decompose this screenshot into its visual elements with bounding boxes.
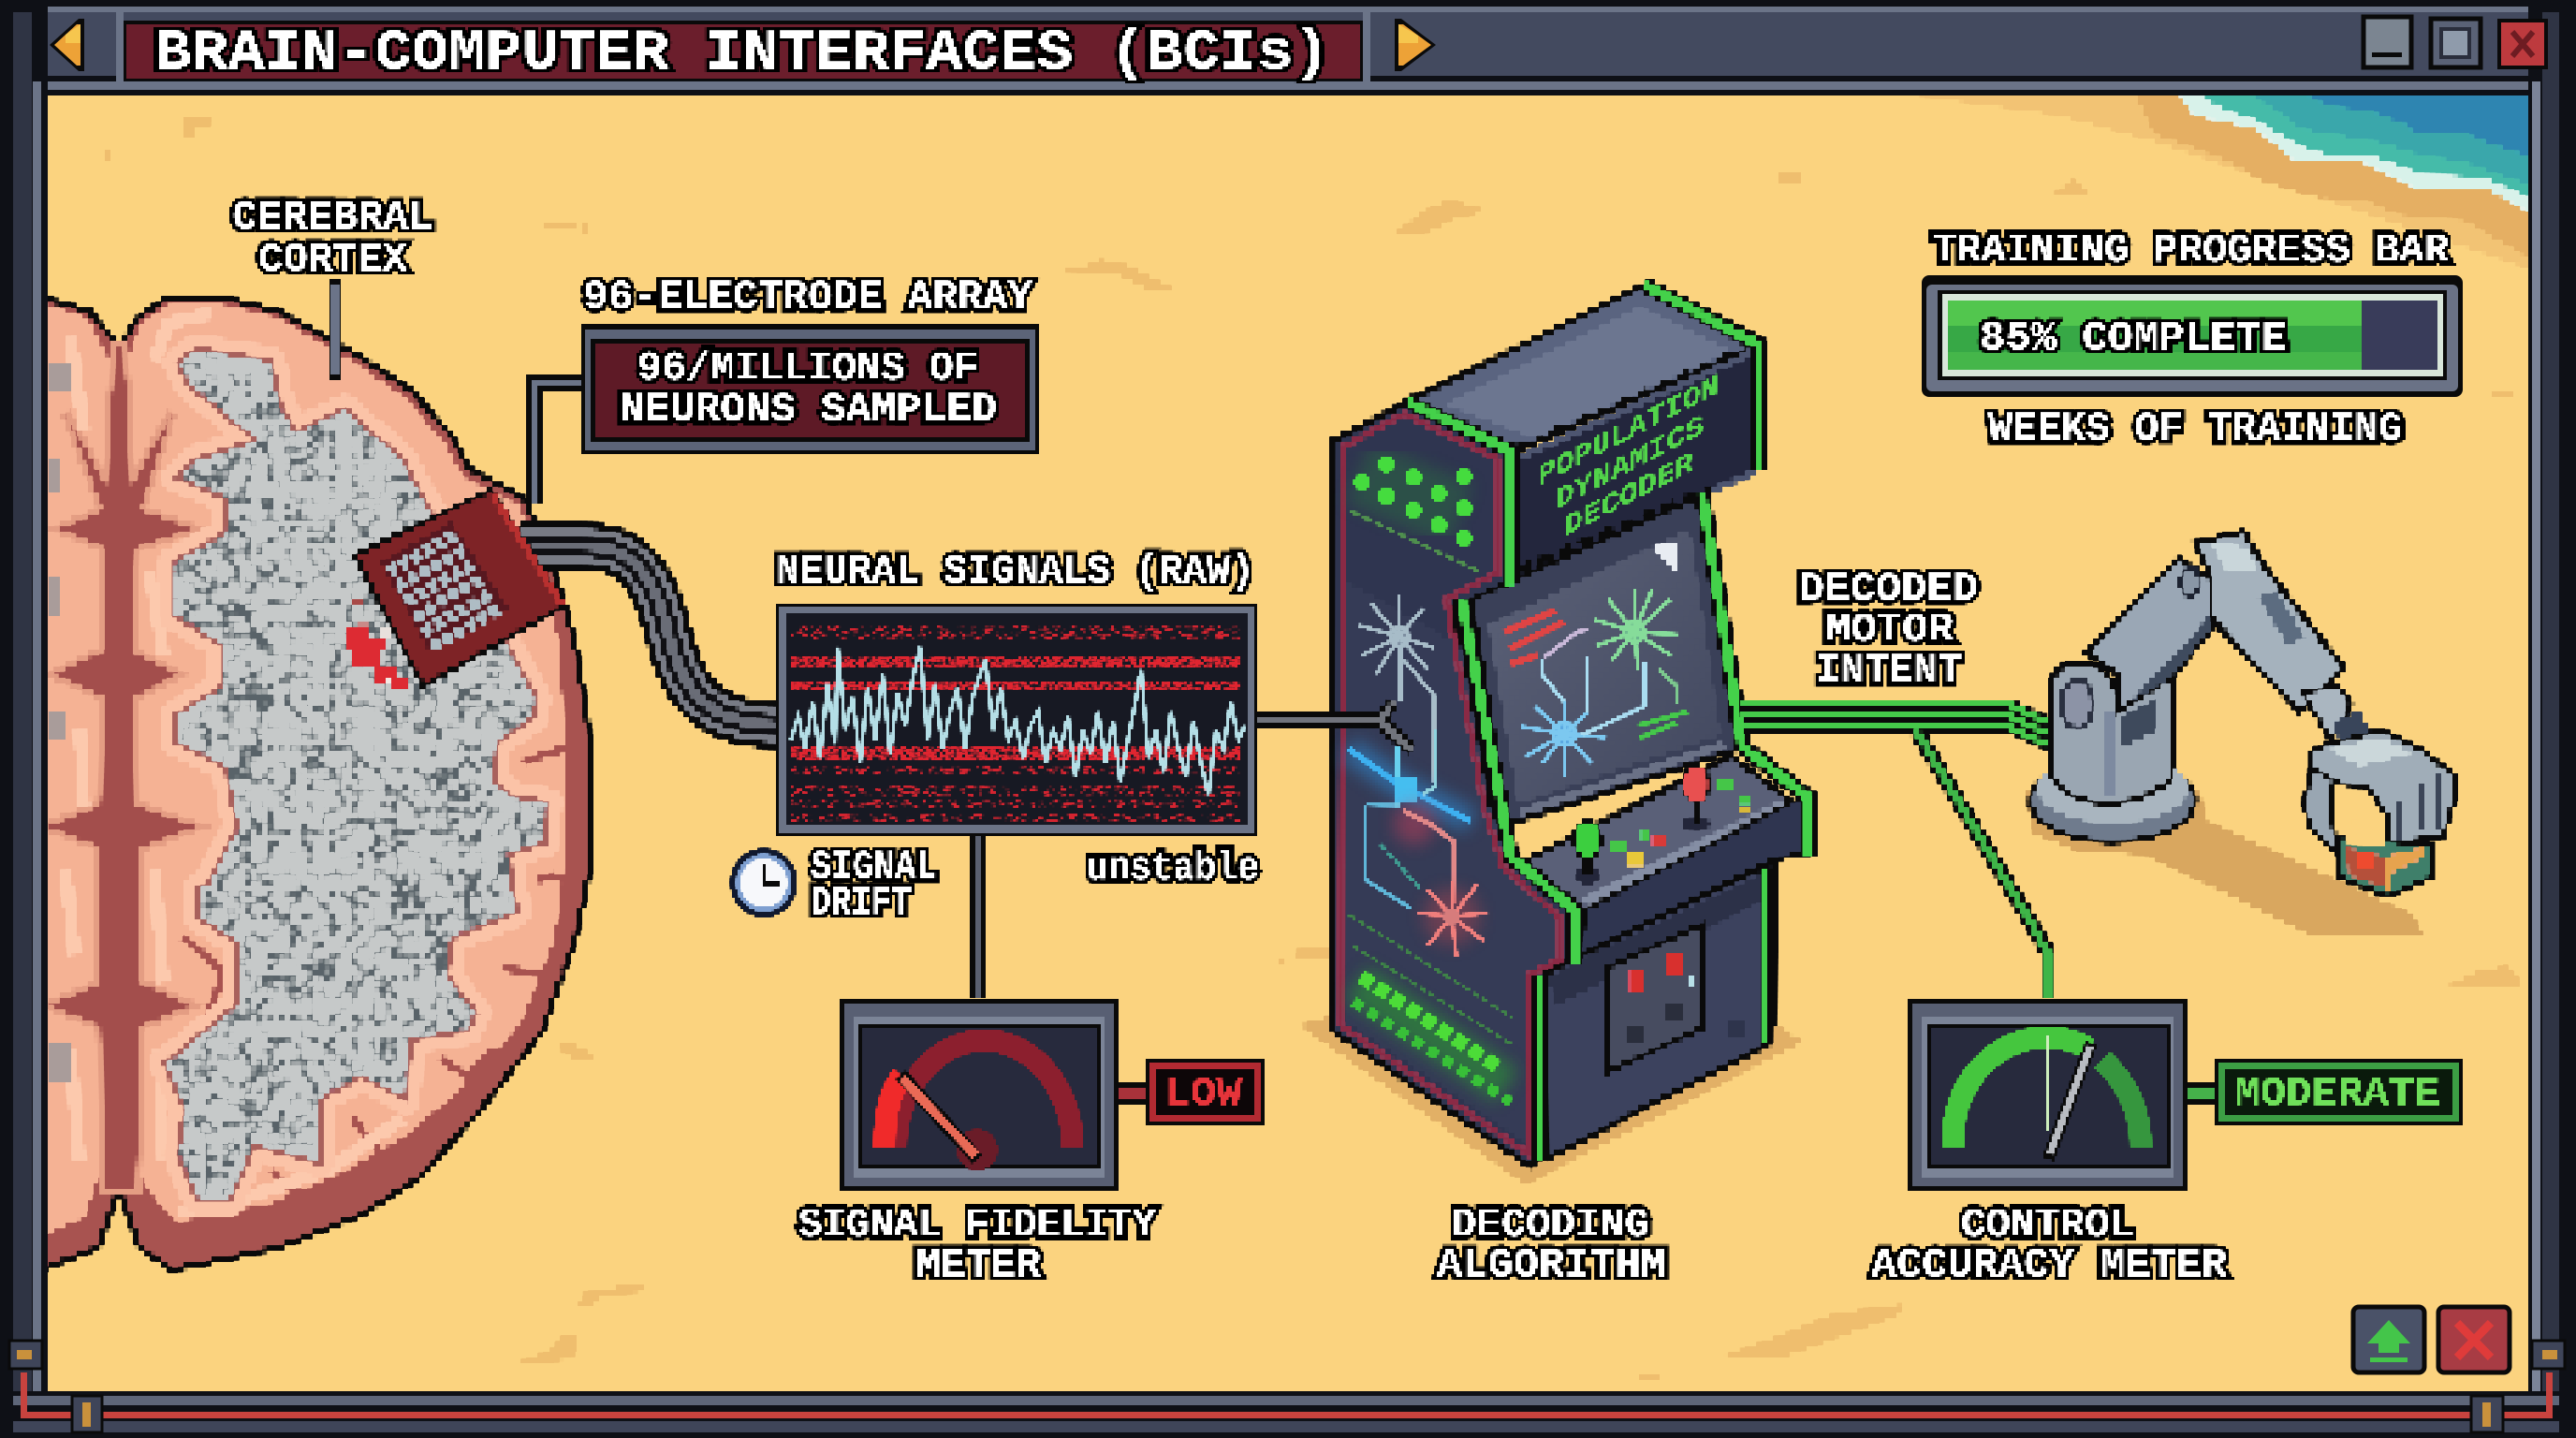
coin slots (1625, 951, 1747, 1045)
dry dark sand band (1880, 90, 2539, 271)
panel buttons (1610, 777, 1749, 866)
maroon trim (1340, 414, 1559, 1153)
neural signal monitor frame (776, 604, 1257, 836)
joystick red (1682, 766, 1710, 832)
screen green dashes (1638, 712, 1688, 738)
training progress bar (1922, 275, 2463, 397)
label: signal fidelity meter: SIGNAL FIDELITY (798, 1202, 1157, 1249)
palm highlight (2331, 738, 2410, 766)
red status line (23, 1412, 2553, 1418)
wrist joint (2334, 712, 2373, 744)
connector bottom right (2471, 1396, 2503, 1432)
label: decoded motor intent: MOTOR (1825, 607, 1954, 653)
accuracy needle core (2050, 1047, 2090, 1153)
label: control accuracy meter: ACCURACY METER (1871, 1242, 2228, 1289)
green motor intent wires (1742, 705, 2055, 1000)
close button (2499, 21, 2546, 67)
lower cabinet (1544, 861, 1775, 1158)
lower cabinet shadow band (1548, 871, 1767, 1006)
joystick green (1573, 821, 1602, 885)
pedestal (2052, 663, 2172, 803)
cube orange seam (2385, 847, 2424, 894)
label: decoded motor intent: INTENT (1816, 648, 1962, 695)
cabinet LED cluster (1354, 456, 1472, 547)
arcade marquee text: DYNAMICS (1556, 409, 1704, 518)
forearm highlight (2211, 541, 2258, 573)
label: decoding algorithm (1437, 1202, 1666, 1289)
fidelity hub (957, 1129, 998, 1170)
brain illustration (41, 298, 593, 1269)
screen blue neuron (1521, 702, 1606, 777)
cube red face (2345, 847, 2385, 888)
neck (1474, 494, 1713, 627)
robot arm shadow (2025, 789, 2422, 933)
progress value: 85% COMPLETE (1980, 315, 2287, 362)
fidelity gauge housing (840, 999, 1119, 1191)
marquee (1517, 348, 1755, 582)
wrist (2303, 685, 2351, 740)
accuracy needle (2048, 1043, 2091, 1159)
label: decoding algorithm: DECODING (1452, 1202, 1649, 1249)
light highlights (66, 314, 402, 1212)
red corner left (21, 1372, 27, 1418)
raw signal scattered noise (791, 625, 1240, 821)
window panels (crisp) (581, 275, 2463, 1191)
label: unstable: unstable (1087, 845, 1259, 892)
label: cerebral cortex: CORTEX (258, 237, 408, 284)
frame bottom (0, 1391, 2576, 1438)
electrode stat text (620, 345, 997, 433)
cancel button (2438, 1307, 2510, 1372)
label: signal drift: SIGNAL (811, 844, 937, 891)
label: cerebral cortex (232, 195, 433, 284)
label: training progress bar: TRAINING PROGRESS BAR (1932, 227, 2450, 274)
arcade marquee text: DECODER (1564, 446, 1693, 545)
control panel strip (1585, 803, 1785, 902)
control panel front (1581, 800, 1807, 955)
base top highlight (2038, 756, 2188, 823)
screen green neuron (1595, 590, 1679, 669)
arcade marquee text: POPULATION (1538, 369, 1719, 494)
held cube (2340, 836, 2431, 896)
label: control accuracy meter (1871, 1202, 2228, 1289)
label: cerebral cortex: CEREBRAL (232, 195, 433, 242)
frame right (2528, 0, 2576, 1438)
top face (1408, 286, 1759, 451)
fidelity gauge hot arc (885, 1077, 902, 1148)
side red signal and neuron (1394, 803, 1488, 957)
elbow bolt (2181, 568, 2200, 596)
minimize button (2364, 17, 2411, 67)
shoulder bolt (2061, 680, 2093, 728)
fidelity gauge dim arc (896, 1040, 1073, 1148)
upper arm (2087, 559, 2217, 712)
label: neural signals: NEURAL SIGNALS (RAW) (776, 549, 1254, 595)
main title: BRAIN-COMPUTER INTERFACES (BCIs) (154, 22, 1330, 86)
frame left (0, 0, 48, 1438)
label: decoded motor intent: DECODED (1799, 566, 1978, 613)
electrode info box (581, 324, 1039, 454)
arcade marquee text (1538, 369, 1719, 545)
top face highlight (1446, 307, 1732, 438)
accuracy gauge arc bright (1954, 1037, 2089, 1148)
accuracy gauge arc dim (2102, 1060, 2141, 1148)
raw signal strong noise bands (791, 657, 1240, 760)
back arrow (50, 19, 84, 71)
pedestal inner dark gap (2119, 697, 2158, 749)
side panel lighter shading (1344, 580, 1559, 1142)
cortex leader line (329, 281, 342, 379)
cabinet LED glow (1359, 473, 1460, 515)
accuracy pale line (2046, 1035, 2050, 1132)
connector right side (2532, 1341, 2565, 1369)
coin door (1608, 924, 1704, 1072)
moderate value: MODERATE (2234, 1071, 2440, 1118)
low tag (1146, 1059, 1265, 1125)
text labels (154, 22, 2450, 1289)
wet sand (2134, 90, 2539, 264)
cortex grey region outline glow (164, 348, 549, 1201)
monitor to arcade connector (1254, 702, 1413, 751)
mid water (2244, 90, 2539, 187)
salmon gyri (41, 303, 565, 1236)
base disc (2030, 759, 2195, 842)
marquee bottom checker edge (1517, 488, 1712, 570)
fidelity needle (900, 1075, 977, 1159)
screen signal links (1543, 629, 1676, 735)
screen red dashes (1504, 610, 1564, 664)
electrode stat text: 96/MILLIONS OF (637, 345, 978, 392)
bar housing (1922, 275, 2463, 397)
marquee top checker edge (1515, 351, 1741, 449)
side lower green LED rows (1349, 915, 1513, 1102)
sulci (183, 749, 569, 1196)
lesion blood speckles (348, 599, 406, 691)
ocean shoreline (1880, 90, 2539, 271)
left finger (2305, 768, 2337, 852)
forward arrow (1395, 19, 1436, 71)
red corner right (2546, 1372, 2553, 1418)
label: signal drift: DRIFT (811, 880, 912, 927)
cube red core (2357, 854, 2374, 867)
robot arm (2030, 532, 2455, 896)
chip body (355, 490, 564, 686)
frame top bar (0, 0, 2576, 95)
electrode stat text: NEURONS SAMPLED (620, 387, 997, 433)
brain outer rim (41, 298, 593, 1269)
arcade cabinet (1333, 286, 1808, 1167)
fine detail layer (730, 369, 2141, 1170)
label: signal drift (811, 844, 937, 927)
electrode box connector (534, 384, 582, 505)
pedestal light strip (2102, 712, 2114, 798)
connector bottom left (72, 1396, 102, 1432)
label: electrode array: 96-ELECTRODE ARRAY (583, 274, 1033, 321)
monitor to gauge connector (971, 811, 984, 1000)
moderate tag (2215, 1059, 2463, 1125)
screen bezel (1471, 495, 1738, 824)
central fissure (47, 348, 197, 1187)
label: control accuracy meter: CONTROL (1961, 1202, 2134, 1249)
screen highlight (1653, 541, 1676, 571)
cortex grey neural tissue (164, 348, 549, 1201)
label: decoding algorithm: ALGORITHM (1437, 1242, 1666, 1289)
control panel top (1525, 756, 1792, 910)
screen bottom strip (1521, 744, 1724, 813)
chip edge highlight (493, 496, 562, 604)
electrode grid base (380, 521, 509, 653)
label: decoded motor intent (1799, 566, 1978, 695)
side neuron grey (1359, 594, 1434, 783)
cube top (2345, 813, 2387, 847)
low value: LOW (1164, 1071, 1243, 1118)
palm (2312, 730, 2455, 861)
forearm vent (2258, 590, 2305, 648)
screen glass (1488, 529, 1720, 803)
maximize button (2431, 19, 2481, 67)
title plate (116, 7, 1370, 81)
foam (2176, 90, 2539, 217)
green trim strips (1408, 286, 1808, 1161)
accuracy gauge housing (1908, 999, 2188, 1191)
raw signal trace (791, 647, 1245, 795)
cabinet dashed green line (1351, 511, 1481, 572)
upload button (2353, 1307, 2424, 1372)
label: weeks of training: WEEKS OF TRAINING (1988, 406, 2403, 453)
fingers dark (2396, 775, 2441, 850)
low tag connector (1114, 1084, 1149, 1103)
small grey patches (49, 365, 69, 1084)
cortex edge (164, 348, 549, 1201)
electrode pins (386, 530, 501, 652)
signal drift clock (730, 848, 798, 917)
bar fill (1948, 301, 2362, 370)
moderate tag connector (2183, 1084, 2218, 1103)
cabinet side panel (1333, 404, 1574, 1167)
deep water (2296, 90, 2539, 159)
bar fill darker band (1948, 326, 2362, 352)
fidelity needle core (902, 1078, 975, 1155)
upper arm dark underside (2130, 613, 2211, 702)
connector left side (9, 1341, 42, 1369)
forearm (2196, 532, 2343, 712)
shallow water (2190, 90, 2539, 202)
label: signal fidelity meter: METER (915, 1242, 1042, 1289)
bar track (1938, 290, 2447, 380)
96-electrode array chip (355, 490, 564, 686)
label: signal fidelity meter (798, 1202, 1157, 1289)
side blue signal arc (1349, 730, 1471, 908)
electrode ribbon cable (521, 546, 782, 726)
arcade shadow (1300, 1016, 1802, 1184)
